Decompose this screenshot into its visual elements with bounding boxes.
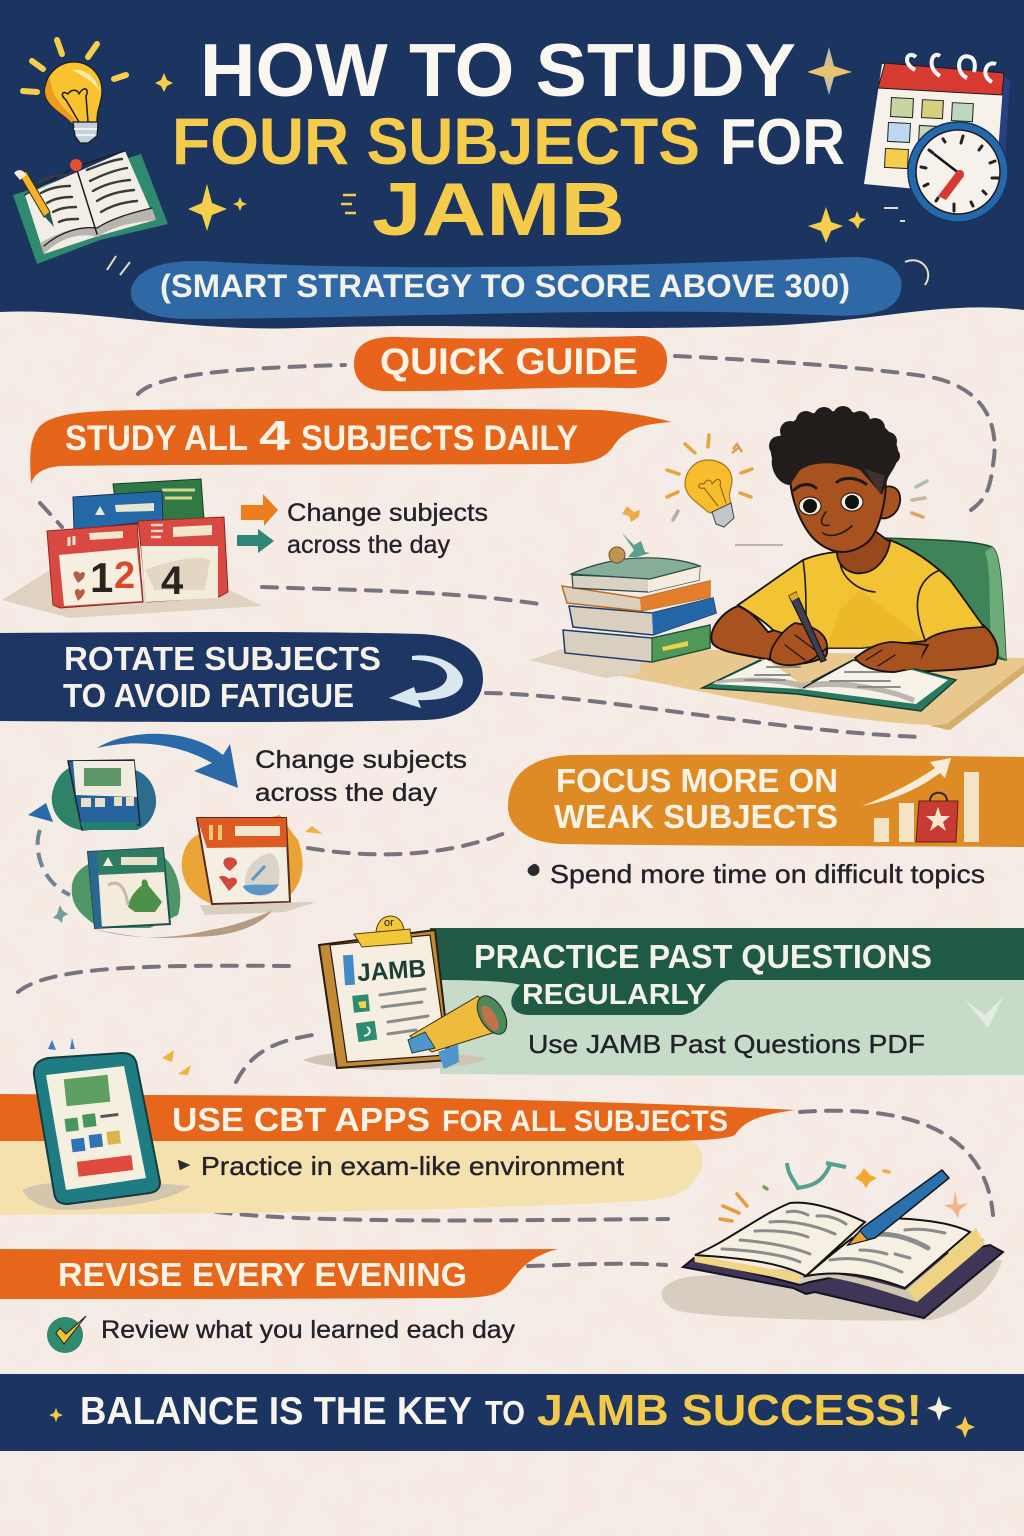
icon: blue cycle arrows (97, 734, 238, 788)
icon: calendar and folder stack: 1 (90, 554, 113, 601)
banner: focus more (508, 755, 1024, 847)
icon: calendar and folder stack: 2 (114, 555, 135, 597)
note: difficult topics: Spend more time on difficult topics (550, 859, 985, 889)
note: change subjects: Change subjects (287, 499, 488, 527)
title: HOW TO STUDY (200, 28, 796, 112)
section: revise every evening (0, 1249, 558, 1353)
icon: calendar and folder stack (2, 479, 262, 618)
icon: clipboard and megaphone (303, 916, 513, 1070)
icon: tablet card (52, 760, 156, 830)
banner: study all subjects (30, 408, 672, 484)
open book (702, 659, 956, 711)
badge: quick guide: QUICK GUIDE (380, 341, 638, 382)
title: JAMB (372, 167, 625, 251)
title: FOR (720, 105, 845, 178)
orange ribbon: USE CBT APPS (172, 1101, 430, 1138)
section: cbt apps (0, 1038, 795, 1215)
banner: focus more: WEAK SUBJECTS (554, 798, 838, 835)
stack of books (562, 533, 716, 662)
orange banner (0, 1249, 558, 1299)
badge: quick guide (354, 336, 667, 391)
hair (769, 406, 900, 495)
icon: calendar and folder stack: 4 (161, 559, 184, 603)
icon: light bulb header (23, 40, 126, 143)
icon: calendar and clock (864, 55, 1010, 222)
banner: study all subjects: STUDY ALL (65, 419, 248, 458)
icon: clipboard and megaphone: JAMB (356, 955, 427, 987)
icon: open book and pencil header (13, 151, 168, 264)
footer banner (0, 1374, 1024, 1451)
icon: cycle arrow (389, 655, 463, 708)
banner: focus more: FOCUS MORE ON (556, 762, 838, 799)
orange banner: REVISE EVERY EVENING (58, 1256, 467, 1293)
section: focus on weak subjects (508, 755, 1024, 889)
orange ribbon: FOR ALL SUBJECTS (442, 1105, 728, 1138)
banner: rotate subjects: ROTATE SUBJECTS (64, 640, 381, 677)
note: review: Review what you learned each day (101, 1316, 516, 1344)
icon: light bulb (622, 435, 927, 545)
section: study all 4 subjects daily (2, 408, 672, 618)
icon: green card (72, 848, 180, 928)
note: change subjects: Change subjects (255, 746, 467, 774)
banner: study all subjects: SUBJECTS DAILY (301, 419, 578, 458)
ear (880, 486, 900, 518)
eyes (794, 478, 866, 535)
note: past questions pdf: Use JAMB Past Questions PDF (528, 1029, 925, 1059)
icon: check mark (47, 1316, 86, 1353)
dark green banner: REGULARLY (522, 979, 706, 1011)
note: change subjects (255, 746, 467, 807)
note: change subjects (287, 499, 488, 559)
subtitle ribbon: (SMART STRATEGY TO SCORE ABOVE 300) (160, 268, 850, 304)
section: practice past questions (303, 916, 1024, 1076)
decorative sparkles in header (107, 47, 928, 285)
note: change subjects: across the day (287, 531, 450, 559)
beige panel (0, 1138, 703, 1215)
left arm (711, 606, 827, 664)
illustration: boy studying at desk (530, 406, 1024, 730)
subtitle ribbon (131, 257, 902, 319)
section: rotate subjects (0, 632, 483, 938)
footer banner: BALANCE IS THE KEY (80, 1390, 472, 1433)
icon: swap arrows (237, 494, 278, 553)
note: exam environment: Practice in exam-like environment (201, 1151, 625, 1181)
chair (885, 538, 1006, 660)
connector dashes top (18, 356, 995, 1266)
dark green banner: PRACTICE PAST QUESTIONS (474, 938, 932, 975)
face (790, 457, 886, 552)
banner: rotate subjects: TO AVOID FATIGUE (63, 677, 354, 714)
dark green banner (430, 928, 1024, 1015)
icon: chart and bag (862, 758, 979, 842)
banner: rotate subjects (0, 632, 483, 722)
rotation illustration (28, 734, 323, 938)
note: change subjects: across the day (255, 779, 438, 807)
hands and pen (770, 592, 928, 672)
neck (837, 520, 890, 573)
icon: red card (182, 815, 323, 915)
header panel (0, 0, 1024, 328)
banner: study all subjects: 4 (259, 412, 291, 459)
light green panel (440, 978, 1024, 1076)
title: FOUR SUBJECTS (172, 104, 700, 178)
icon: cbt tablet (22, 1038, 191, 1210)
illustration: open book and pen (662, 1163, 1003, 1321)
footer banner: JAMB SUCCESS! (537, 1386, 922, 1435)
yellow shirt (738, 540, 984, 648)
rotation shadow (90, 911, 272, 938)
desk surface (530, 648, 1024, 730)
footer banner: TO (485, 1394, 525, 1431)
orange ribbon (0, 1094, 795, 1141)
title (172, 28, 845, 251)
right arm (858, 625, 998, 672)
icon: clipboard and megaphone: or (384, 917, 394, 929)
